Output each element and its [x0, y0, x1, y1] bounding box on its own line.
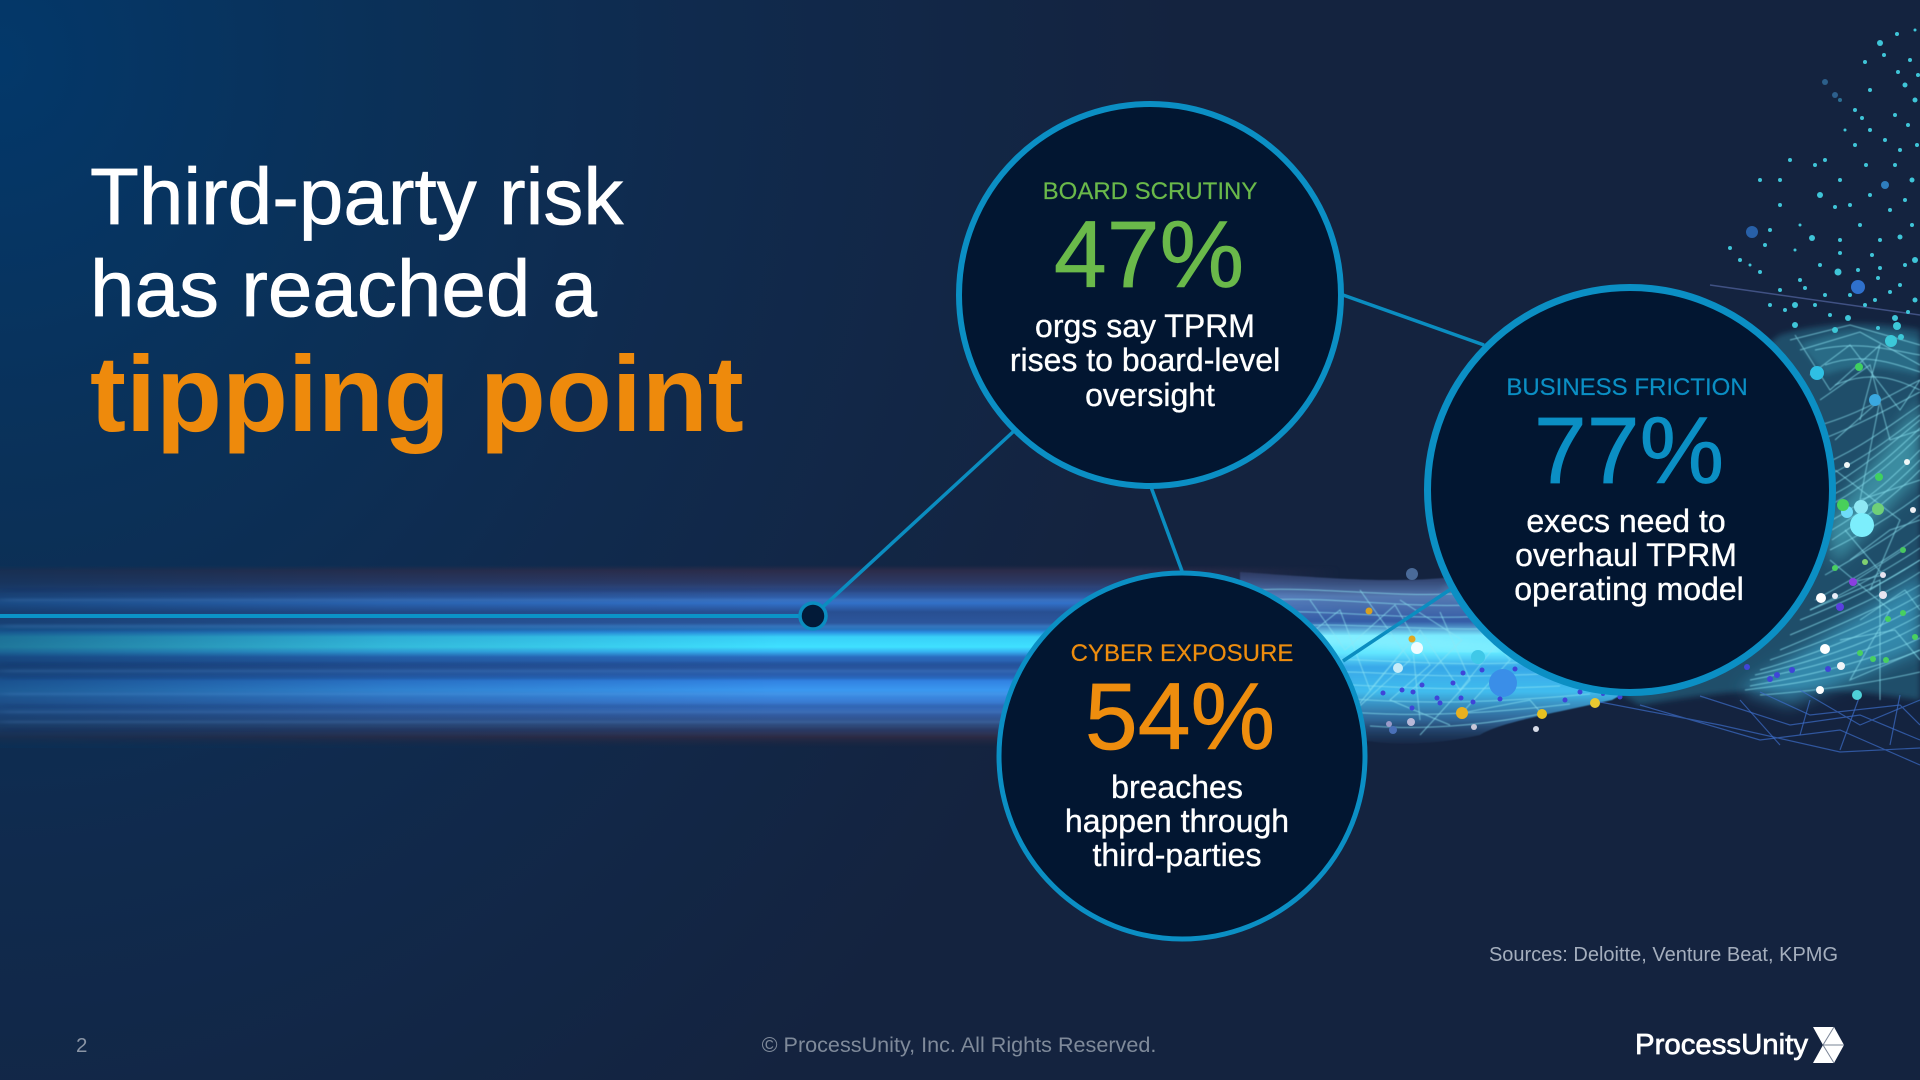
description: third-parties	[1093, 837, 1261, 873]
description: execs need to	[1526, 503, 1726, 539]
scattered particles	[1728, 28, 1920, 330]
description: orgs say TPRM	[1035, 308, 1255, 344]
description: happen through	[1065, 803, 1289, 839]
label: business friction: BUSINESS FRICTION	[1506, 374, 1748, 401]
mesh: dark hazy base	[1240, 324, 1920, 744]
connector: timeline line to dot	[0, 431, 1014, 629]
title	[90, 152, 744, 454]
description: oversight	[1085, 377, 1215, 413]
network mesh graphic	[1240, 28, 1920, 765]
label: board scrutiny: BOARD SCRUTINY	[1043, 178, 1257, 205]
logo: ProcessUnity: ProcessUnity	[1635, 1029, 1809, 1061]
page number: 2	[76, 1034, 87, 1057]
connectors between circles	[1151, 295, 1484, 661]
copyright: © ProcessUnity, Inc. All Rights Reserved.	[762, 1032, 1156, 1057]
mesh nodes: left cluster	[1366, 568, 1622, 734]
description: operating model	[1514, 571, 1744, 607]
icon: hexagon mark	[1813, 1027, 1844, 1063]
mesh nodes: right cluster	[1744, 322, 1918, 700]
description: breaches	[1111, 769, 1243, 805]
sources note: Sources: Deloitte, Venture Beat, KPMG	[1489, 944, 1838, 966]
title: has reached a	[90, 244, 598, 333]
title: tipping point	[90, 333, 744, 454]
mesh: strands	[1250, 325, 1920, 735]
stat: 47%: 47%	[1054, 202, 1244, 308]
description: rises to board-level	[1010, 342, 1280, 378]
stat: 77%: 77%	[1534, 398, 1724, 504]
panel: cyber exposure	[999, 573, 1365, 939]
light streak band	[0, 567, 1287, 742]
stat: 54%: 54%	[1085, 664, 1275, 770]
panel: board scrutiny	[959, 104, 1341, 486]
label: cyber exposure: CYBER EXPOSURE	[1071, 640, 1293, 667]
panel: business friction	[1428, 288, 1832, 692]
mesh: lower thin strands	[1600, 690, 1920, 765]
title: Third-party risk	[90, 152, 624, 241]
description: overhaul TPRM	[1515, 537, 1737, 573]
